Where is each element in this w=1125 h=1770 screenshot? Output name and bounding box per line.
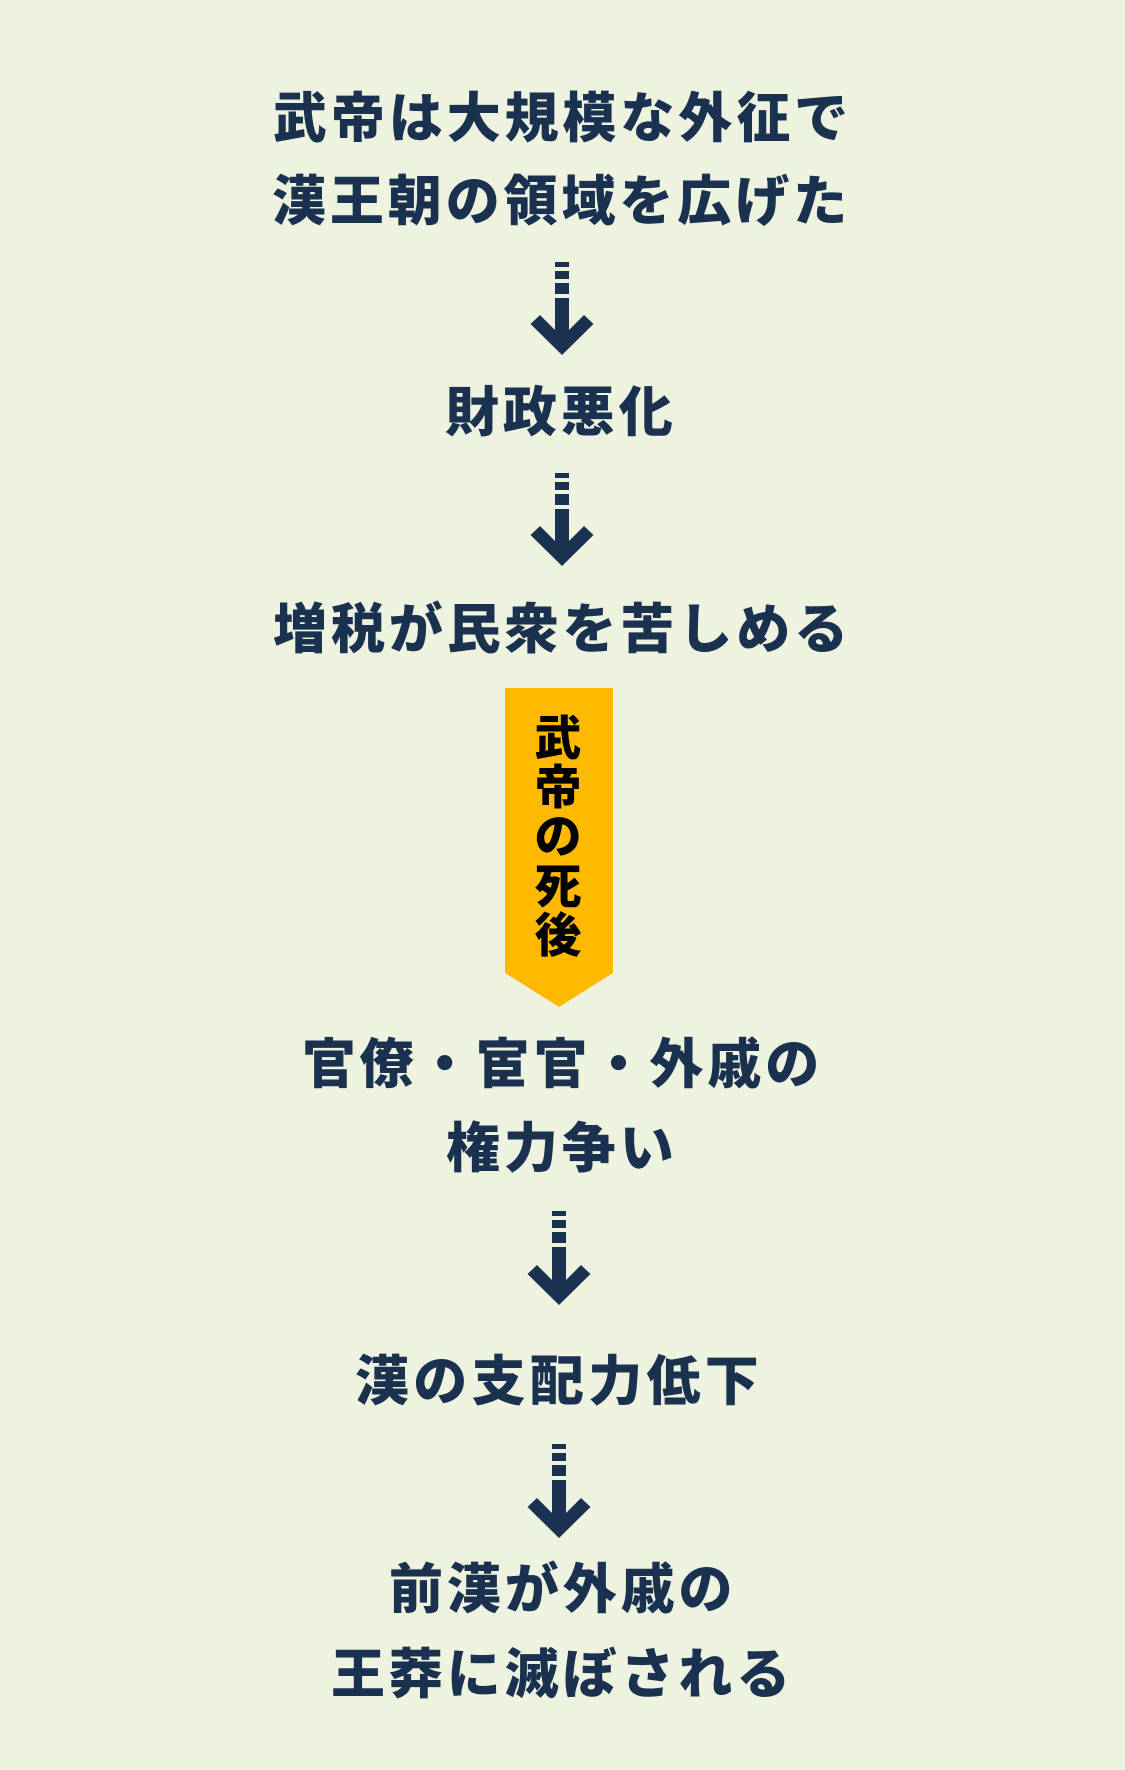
text: power struggle, line 1: 官僚・宦官・外戚の (302, 1035, 823, 1095)
text: tax increase burdens the people: 増税が民衆を苦しめる (273, 600, 852, 660)
arrow: down 3 (528, 1211, 590, 1305)
heading: first cause, line 1: 武帝は大規模な外征で (273, 89, 852, 149)
banner text: 死 (534, 860, 582, 913)
arrow: down 2 (530, 473, 594, 566)
banner text: 帝 (534, 761, 582, 814)
text: declining control of Han: 漢の支配力低下 (355, 1352, 763, 1412)
text: power struggle, line 2: 権力争い (446, 1119, 678, 1179)
arrow: down 1 (530, 262, 594, 355)
arrow: down 4 (528, 1444, 590, 1538)
banner text: 後 (534, 909, 582, 962)
heading: first cause, line 2: 漢王朝の領域を広げた (272, 172, 851, 232)
banner shape (505, 688, 613, 1007)
banner: after the death of Emperor Wu (505, 688, 613, 1007)
text: fall of Former Han, line 1: 前漢が外戚の (389, 1560, 736, 1620)
banner text: の (534, 810, 582, 863)
text: fiscal deterioration: 財政悪化 (445, 383, 677, 443)
text: fall of Former Han, line 2: 王莽に滅ぼされる (331, 1645, 794, 1705)
banner text: 武 (534, 712, 582, 765)
banner text (534, 712, 582, 962)
